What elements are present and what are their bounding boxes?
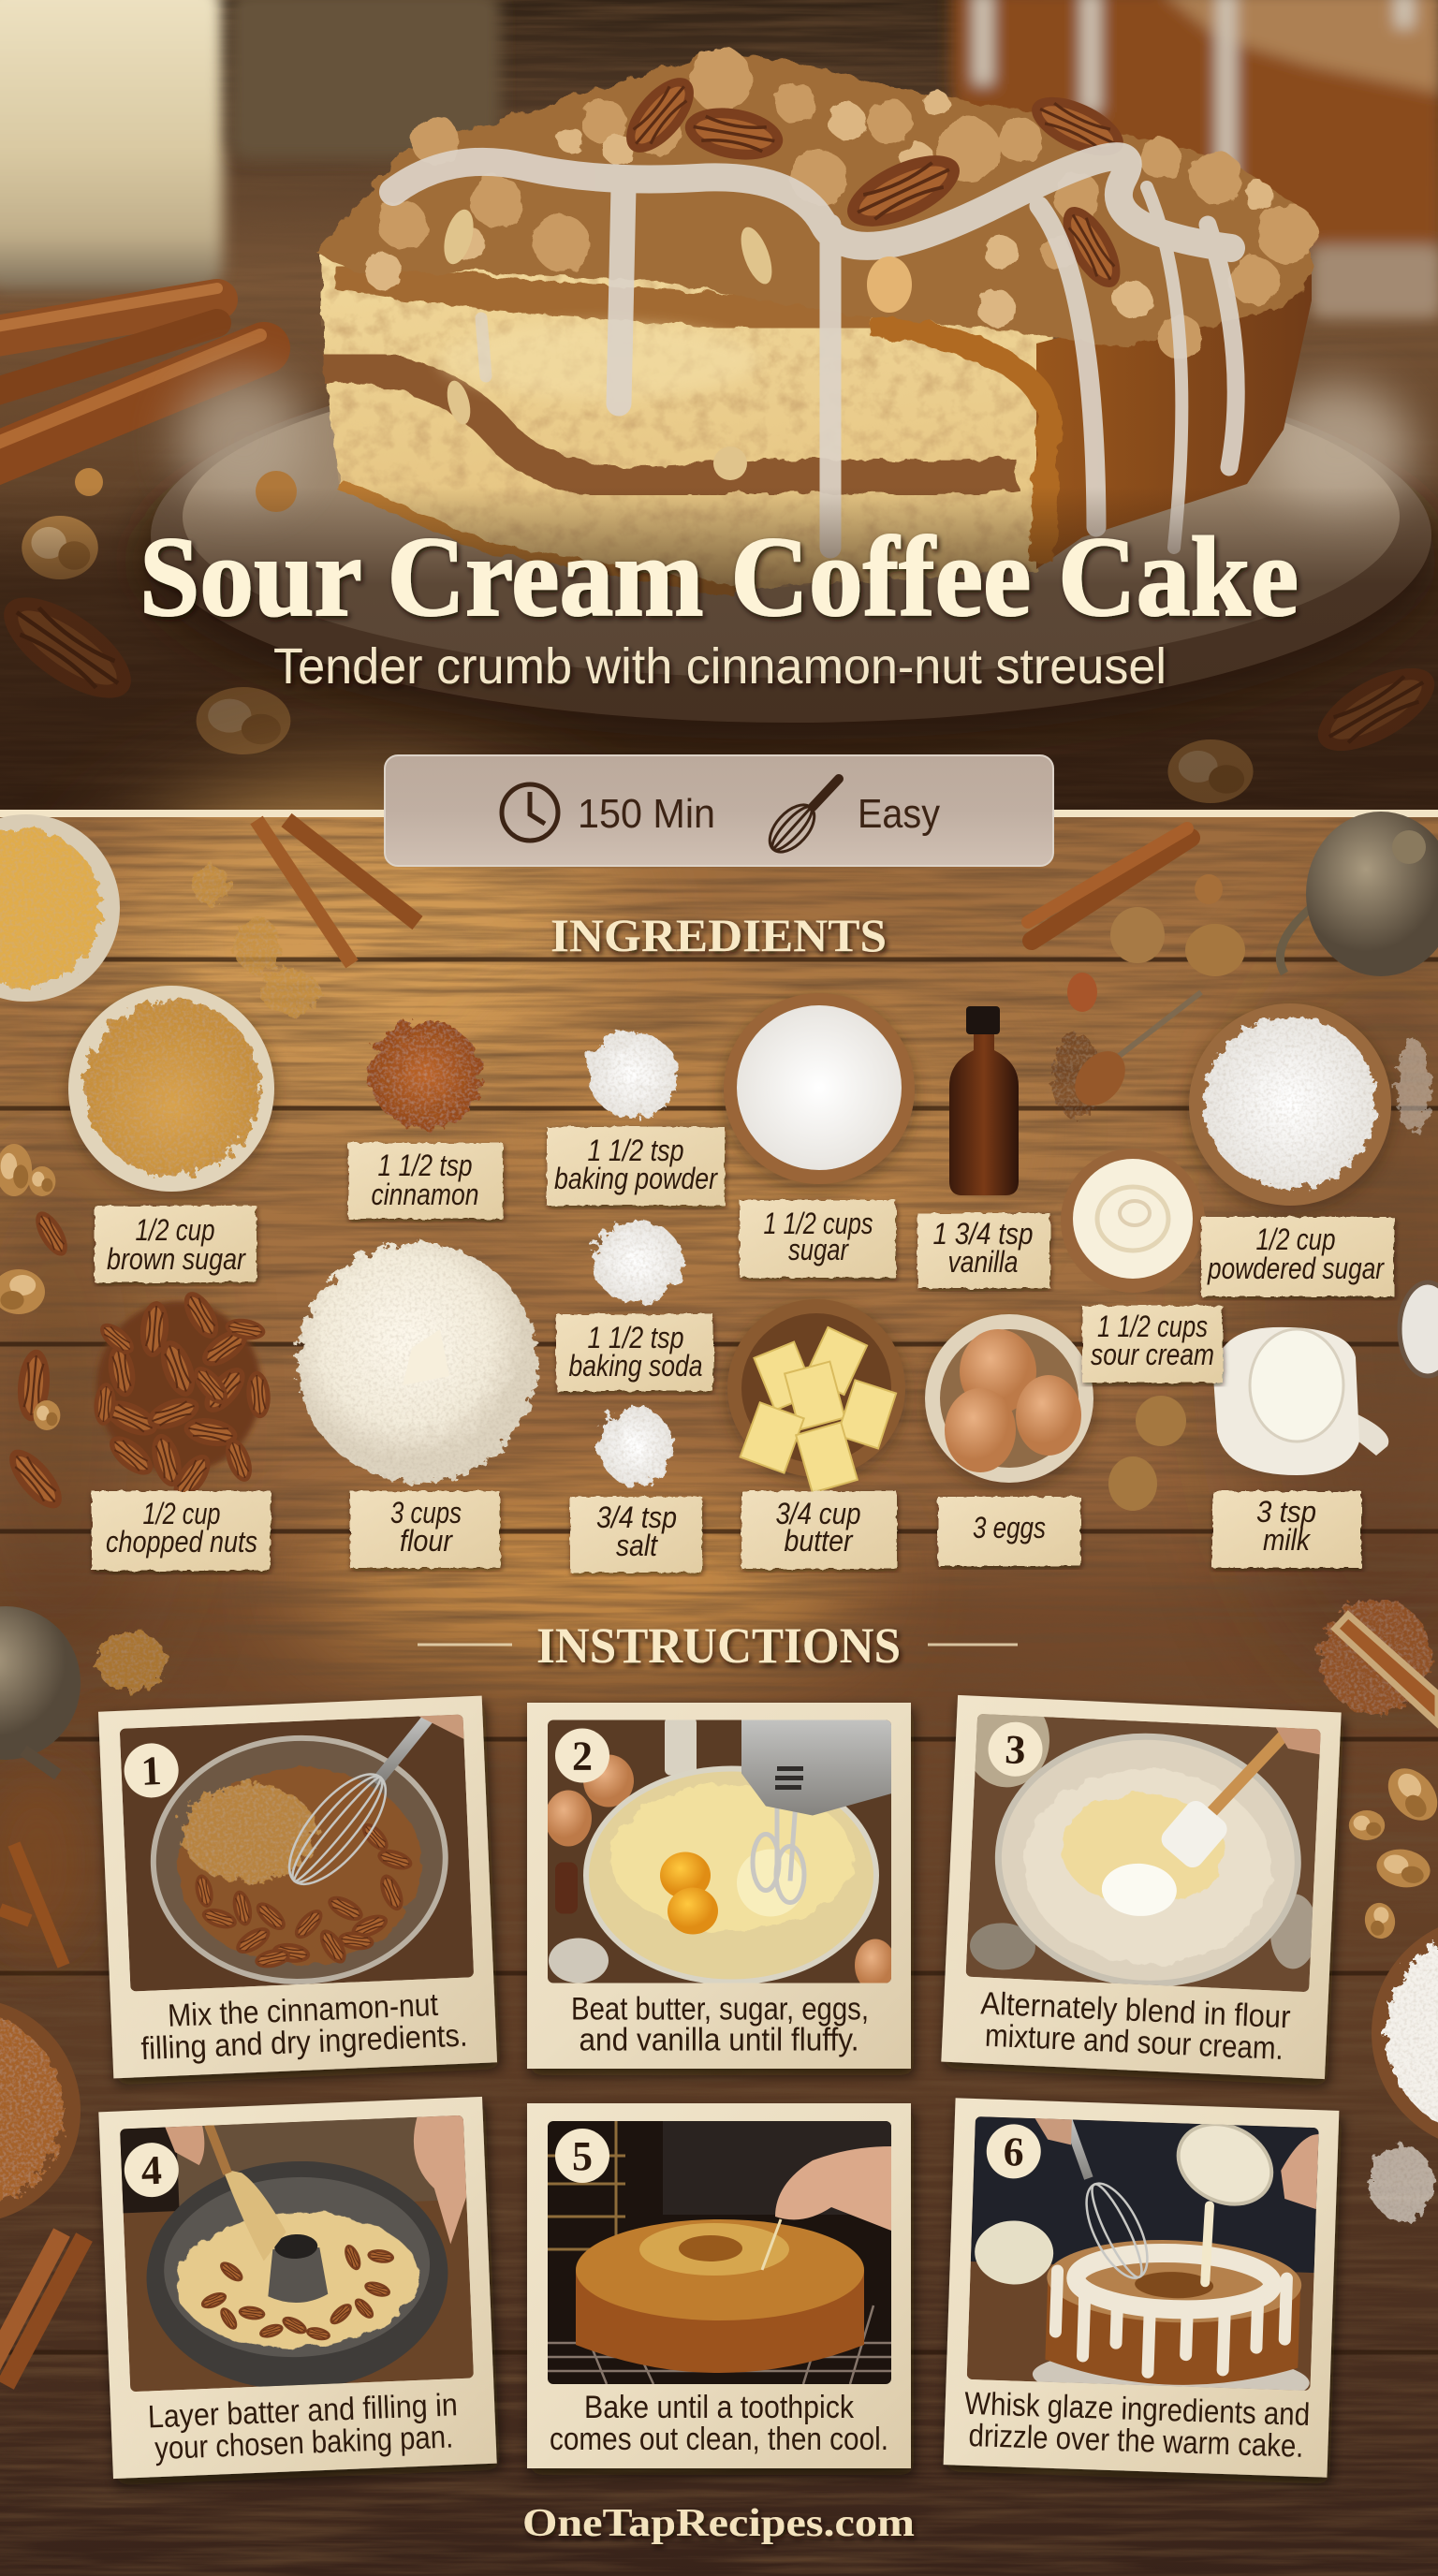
cinnamon sticks right [1028, 828, 1191, 941]
panel: table props top [0, 812, 1438, 1015]
step text [963, 2386, 1311, 2465]
brown sugar bowl [66, 986, 276, 1198]
label: eggs [938, 1497, 1080, 1566]
golden spice scatter [192, 864, 320, 1015]
baking powder pile [588, 1032, 678, 1118]
label: milk: 3 tsp [1256, 1495, 1316, 1529]
instructions rules [418, 1644, 1018, 1646]
step text: Bake until a toothpick [584, 2390, 855, 2425]
panel: ingredients [0, 986, 1438, 1573]
cinnamon sticks [0, 288, 264, 461]
cinnamon bowl left [0, 1998, 81, 2223]
label: baking powder: baking powder [554, 1162, 718, 1195]
label: sugar [740, 1200, 896, 1278]
step number 4: 4 [140, 2147, 163, 2194]
white glaze [393, 156, 1236, 548]
powder dust right [1397, 1039, 1431, 1133]
label: sour cream [1082, 1306, 1223, 1383]
step number 2: 2 [572, 1734, 593, 1778]
step text [550, 2390, 888, 2457]
panel: step 4 [98, 2097, 497, 2479]
coffee cake slice [316, 48, 1317, 591]
label: chopped nuts: chopped nuts [106, 1525, 257, 1559]
step number 3: 3 [1004, 1726, 1027, 1773]
step number 3 [987, 1720, 1044, 1778]
label: baking powder [547, 1127, 725, 1206]
chopped pecans pile [93, 1286, 272, 1506]
labels [92, 1127, 1394, 1573]
cinnamon pile [369, 1020, 481, 1129]
spoon with spice [1052, 992, 1201, 1120]
photo: mixing filling [120, 1713, 475, 1992]
brass teapot [1280, 812, 1438, 976]
label: milk: milk [1263, 1523, 1312, 1557]
difficulty text: Easy [858, 791, 940, 837]
step text [139, 1986, 468, 2067]
step text [571, 1992, 869, 2057]
blurred glass of milk [0, 0, 223, 290]
divider band [0, 810, 1438, 817]
darkening under title [0, 487, 1438, 811]
label: brown sugar: 1/2 cup [135, 1213, 215, 1247]
label: baking powder: 1 1/2 tsp [588, 1134, 683, 1167]
panel: step 2 [527, 1703, 911, 2069]
subtitle: Tender crumb with cinnamon-nut streusel [273, 638, 1167, 695]
heading: instructions: INSTRUCTIONS [536, 1617, 901, 1674]
label: powdered sugar: powdered sugar [1207, 1251, 1385, 1285]
label: flour [350, 1491, 500, 1568]
panel: step 5 [527, 2103, 911, 2468]
step number 5: 5 [572, 2133, 593, 2179]
label: sugar: 1 1/2 cups [764, 1207, 873, 1240]
label: cinnamon [348, 1143, 503, 1219]
step number 6 [986, 2123, 1042, 2179]
photo: blending flour and sour cream [966, 1714, 1321, 1992]
blurred jar [229, 0, 501, 159]
label: salt: salt [616, 1529, 658, 1562]
sugar scoop at edge [1400, 1282, 1438, 1376]
cinnamon sticks bottom left [0, 2232, 84, 2385]
step text: drizzle over the warm cake. [968, 2418, 1304, 2465]
label: brown sugar: brown sugar [107, 1242, 246, 1276]
icon: clock [502, 784, 558, 841]
step text: Layer batter and filling in [147, 2387, 458, 2436]
label: salt: 3/4 tsp [596, 1500, 677, 1534]
whole nutmegs [1108, 1396, 1186, 1511]
whole nuts [1067, 874, 1245, 1012]
blurred cake behind [951, 0, 1438, 318]
flour dust right [1370, 2145, 1433, 2220]
label: flour: 3 cups [390, 1496, 462, 1530]
label: baking soda: 1 1/2 tsp [588, 1321, 683, 1354]
step text: comes out clean, then cool. [550, 2422, 888, 2457]
plate [145, 348, 1437, 739]
label: butter: butter [785, 1524, 854, 1558]
label: cinnamon: 1 1/2 tsp [378, 1149, 472, 1182]
label: baking soda [556, 1314, 713, 1391]
title: Sour Cream Coffee Cake [139, 514, 1299, 640]
heading: ingredients: INGREDIENTS [550, 909, 887, 961]
label: eggs: 3 eggs [973, 1511, 1046, 1544]
loose nuts left [0, 1144, 74, 1516]
nuts and crumbs on table [0, 468, 1438, 803]
baking soda pile [593, 1221, 682, 1303]
salt pile [599, 1407, 672, 1486]
label: sour cream: sour cream [1091, 1338, 1214, 1371]
butter bowl [726, 1299, 907, 1493]
step text: and vanilla until fluffy. [579, 2022, 859, 2057]
photo: glazing the cake [966, 2101, 1319, 2411]
label: vanilla [917, 1213, 1050, 1288]
powdered sugar bowl [1187, 1003, 1393, 1213]
step text [147, 2387, 460, 2466]
cinnamon sticks crossed [257, 820, 418, 964]
sugar bowl right [1372, 1916, 1438, 2150]
panel: hero photo [0, 0, 1438, 811]
vanilla bottle [949, 1006, 1019, 1195]
label: powdered sugar: 1/2 cup [1256, 1222, 1335, 1256]
label: chopped nuts [92, 1491, 271, 1571]
panel: step 1 [98, 1696, 497, 2078]
label: milk [1212, 1491, 1361, 1568]
cinnamon sticks left [0, 1844, 64, 1966]
photo: toothpick test [548, 2121, 891, 2384]
label: baking soda: baking soda [569, 1349, 702, 1383]
step text [978, 1985, 1291, 2067]
step text: your chosen baking pan. [154, 2419, 454, 2466]
panel: step 3 [941, 1691, 1342, 2079]
step number 5 [555, 2129, 609, 2183]
step text: Mix the cinnamon-nut [167, 1987, 439, 2034]
badge: time and difficulty [385, 755, 1053, 866]
kettle left [0, 1606, 81, 1775]
step text: Whisk glaze ingredients and [964, 2386, 1311, 2433]
label: chopped nuts: 1/2 cup [142, 1497, 221, 1530]
label: brown sugar [95, 1206, 257, 1282]
streusel topping [316, 53, 1312, 346]
label: cinnamon: cinnamon [371, 1178, 479, 1211]
label: flour: flour [400, 1524, 453, 1558]
large bowl of brown sugar [0, 814, 120, 1002]
label: sour cream: 1 1/2 cups [1097, 1310, 1208, 1343]
spice scatter left [95, 1632, 167, 1691]
step text: Beat butter, sugar, eggs, [571, 1992, 869, 2027]
sugar bowl [722, 993, 917, 1191]
eggs bowl [923, 1314, 1095, 1490]
spice scatter and scoop top right [1320, 1599, 1438, 1724]
step number 1: 1 [140, 1748, 163, 1794]
sour cream bowl [1061, 1149, 1205, 1293]
pecans on top [837, 141, 970, 241]
soft spice left [0, 1774, 94, 1952]
label: salt [570, 1497, 702, 1573]
walnuts right [1349, 1759, 1438, 1941]
label: sugar: sugar [788, 1233, 849, 1266]
label: powdered sugar [1201, 1217, 1394, 1296]
step number 1 [123, 1742, 180, 1799]
photo: beating batter [545, 1717, 897, 1992]
label: vanilla: vanilla [947, 1245, 1019, 1279]
panel: wooden table background [0, 786, 1438, 2576]
panel: instruction props [0, 1599, 1438, 2385]
step number 6: 6 [1003, 2129, 1025, 2175]
footer site name: OneTapRecipes.com [522, 2502, 915, 2545]
flour pile [298, 1243, 537, 1483]
label: butter [741, 1491, 897, 1569]
step number 2 [555, 1728, 609, 1782]
label: butter: 3/4 cup [775, 1497, 861, 1530]
step text: filling and dry ingredients. [140, 2018, 468, 2067]
step text: mixture and sour cream. [984, 2018, 1284, 2067]
milk jug [1213, 1327, 1388, 1475]
step number 4 [124, 2142, 180, 2198]
photo: layering batter [120, 2115, 474, 2396]
label: vanilla: 1 3/4 tsp [932, 1217, 1034, 1251]
step text: Alternately blend in flour [980, 1985, 1291, 2035]
icon: whisk [761, 779, 839, 860]
panel: step 6 [944, 2098, 1339, 2478]
time text: 150 Min [578, 791, 715, 837]
